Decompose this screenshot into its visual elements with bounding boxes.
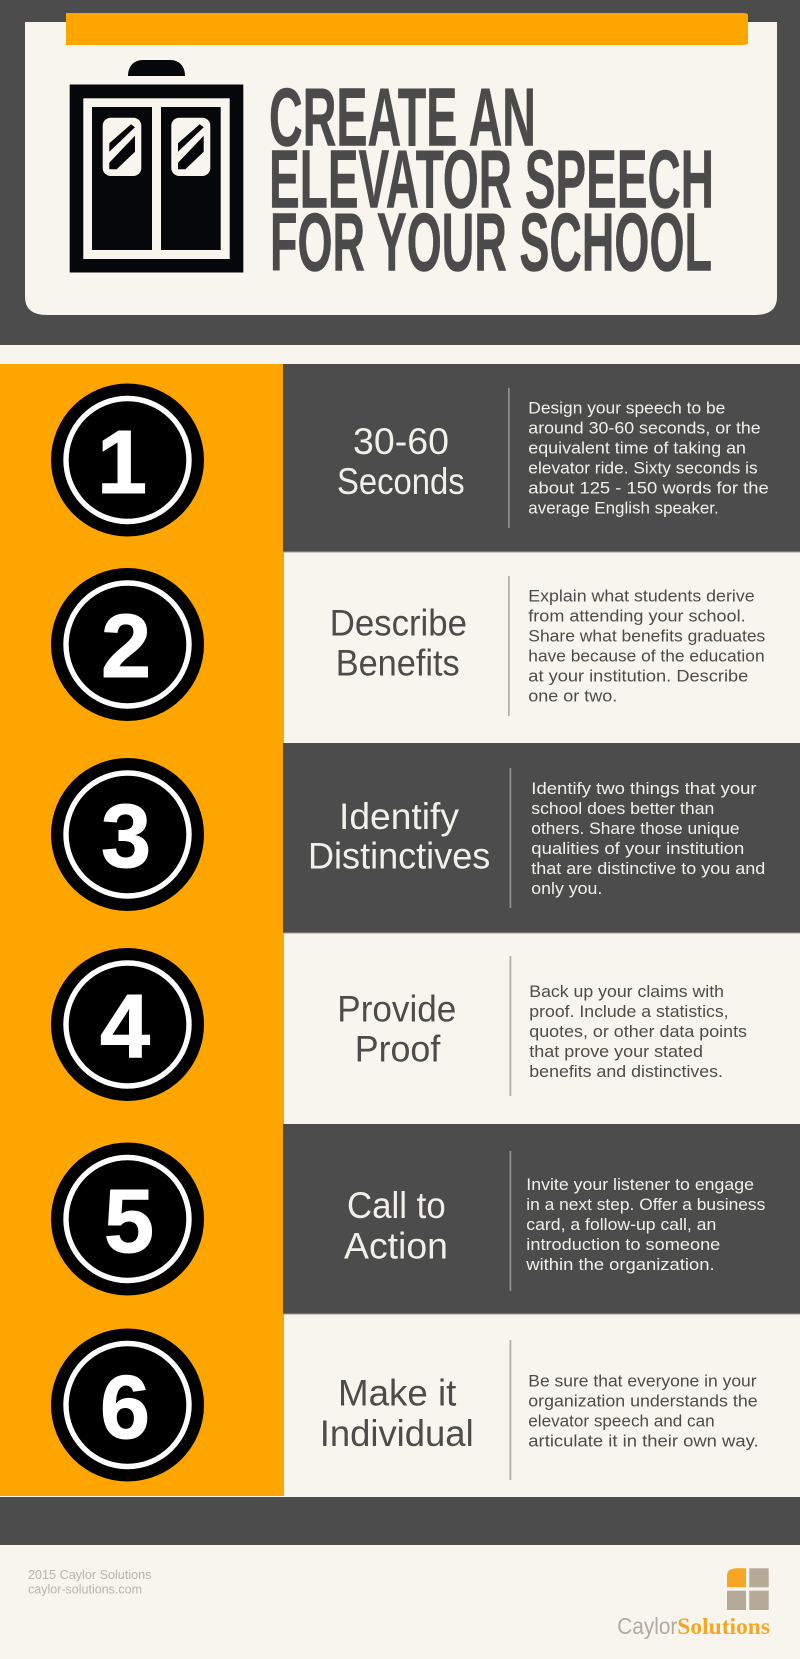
body text 4: Back up your claims with bbox=[529, 982, 724, 1001]
badge 6: 6 bbox=[100, 1358, 150, 1458]
badge 4: 4 bbox=[100, 977, 150, 1077]
badge 1: 1 bbox=[97, 413, 147, 513]
body text 1: average English speaker. bbox=[528, 498, 719, 517]
body text 3: Identify two things that your bbox=[531, 779, 757, 798]
title: CREATE AN bbox=[269, 70, 536, 164]
heading: Call to Action: Action bbox=[344, 1225, 448, 1266]
heading: 30-60 Seconds: 30-60 bbox=[353, 421, 449, 462]
heading: 30-60 Seconds: Seconds bbox=[337, 461, 465, 502]
body text 3: qualities of your institution bbox=[531, 839, 744, 858]
orange number column bbox=[0, 364, 284, 1496]
logo: Caylor Solutions bbox=[617, 1568, 770, 1639]
logo: Caylor Solutions: Solutions bbox=[677, 1614, 770, 1639]
body text 1: equivalent time of taking an bbox=[528, 438, 746, 457]
body text 5: within the organization. bbox=[525, 1255, 715, 1274]
badge 3 bbox=[51, 758, 204, 911]
badge 1 bbox=[51, 384, 204, 536]
badge 4 bbox=[51, 948, 204, 1101]
body text 1: about 125 - 150 words for the bbox=[528, 478, 769, 497]
heading: Provide Proof bbox=[337, 988, 456, 1069]
badge 2: 2 bbox=[101, 597, 151, 697]
dark footer band bbox=[0, 1497, 800, 1545]
body text 4: proof. Include a statistics, bbox=[529, 1002, 729, 1021]
body text 2: Explain what students derive bbox=[528, 586, 755, 605]
body text 2: Share what benefits graduates bbox=[528, 626, 765, 645]
badge 5: 5 bbox=[104, 1172, 154, 1272]
heading: Describe Benefits bbox=[330, 602, 467, 683]
body text 5: card, a follow-up call, an bbox=[526, 1215, 716, 1234]
body text 4: that prove your stated bbox=[529, 1042, 703, 1061]
title bbox=[269, 70, 714, 288]
body text 4 bbox=[529, 982, 747, 1081]
panel: step 5 bbox=[51, 1124, 800, 1314]
icon: elevator bbox=[70, 60, 243, 272]
body text 2 bbox=[528, 586, 765, 705]
heading: Describe Benefits: Describe bbox=[330, 602, 467, 643]
heading: Make it Individual: Individual bbox=[320, 1413, 474, 1454]
body text 5 bbox=[525, 1175, 765, 1274]
panel: step 2 bbox=[51, 552, 800, 743]
body text 4: benefits and distinctives. bbox=[529, 1062, 723, 1081]
panel: step 4 bbox=[51, 934, 800, 1124]
heading: Make it Individual bbox=[320, 1373, 474, 1454]
body text 6: articulate it in their own way. bbox=[528, 1431, 759, 1450]
logo: Caylor Solutions: Caylor bbox=[617, 1613, 678, 1639]
heading: Provide Proof: Proof bbox=[355, 1028, 441, 1069]
header card bbox=[25, 22, 777, 315]
body text 1: Design your speech to be bbox=[528, 398, 725, 417]
orange header bar bbox=[66, 13, 748, 45]
heading: Provide Proof: Provide bbox=[337, 988, 456, 1029]
body text 6: Be sure that everyone in your bbox=[528, 1371, 757, 1390]
body text 1 bbox=[528, 398, 769, 517]
panel: step 1 bbox=[51, 364, 800, 552]
heading: 30-60 Seconds bbox=[337, 421, 465, 502]
footer credit bbox=[28, 1567, 152, 1596]
badge 2 bbox=[51, 568, 204, 721]
body text 5: introduction to someone bbox=[526, 1235, 720, 1254]
heading: Describe Benefits: Benefits bbox=[336, 642, 460, 683]
body text 6: organization understands the bbox=[528, 1391, 758, 1410]
panel: step 6 bbox=[51, 1314, 800, 1496]
heading: Identify Distinctives bbox=[308, 796, 490, 877]
body text 2: have because of the education bbox=[528, 646, 765, 665]
footer credit: 2015 Caylor Solutions bbox=[28, 1567, 152, 1582]
heading: Identify Distinctives: Identify bbox=[339, 796, 459, 837]
body text 3 bbox=[531, 779, 765, 898]
body text 5: in a next step. Offer a business bbox=[526, 1195, 765, 1214]
badge 3: 3 bbox=[101, 787, 151, 887]
body text 6: elevator speech and can bbox=[528, 1411, 715, 1430]
body text 1: around 30-60 seconds, or the bbox=[528, 418, 761, 437]
body text 2: at your institution. Describe bbox=[528, 666, 748, 685]
body text 1: elevator ride. Sixty seconds is bbox=[528, 458, 758, 477]
heading: Identify Distinctives: Distinctives bbox=[308, 836, 490, 877]
body text 2: one or two. bbox=[528, 686, 617, 705]
body text 3: school does better than bbox=[531, 799, 714, 818]
body text 3: others. Share those unique bbox=[531, 819, 740, 838]
heading: Call to Action: Call to bbox=[347, 1185, 446, 1226]
body text 5: Invite your listener to engage bbox=[526, 1175, 754, 1194]
panel: step 3 bbox=[51, 743, 800, 934]
header band bbox=[0, 0, 800, 345]
heading: Call to Action bbox=[344, 1185, 448, 1266]
body text 2: from attending your school. bbox=[528, 606, 746, 625]
badge 6 bbox=[51, 1328, 204, 1482]
body text 6 bbox=[528, 1371, 759, 1450]
body text 3: that are distinctive to you and bbox=[531, 859, 765, 878]
body text 3: only you. bbox=[531, 879, 602, 898]
body text 4: quotes, or other data points bbox=[529, 1022, 747, 1041]
badge 5 bbox=[51, 1142, 204, 1296]
heading: Make it Individual: Make it bbox=[338, 1373, 457, 1414]
footer credit: caylor-solutions.com bbox=[28, 1581, 142, 1596]
